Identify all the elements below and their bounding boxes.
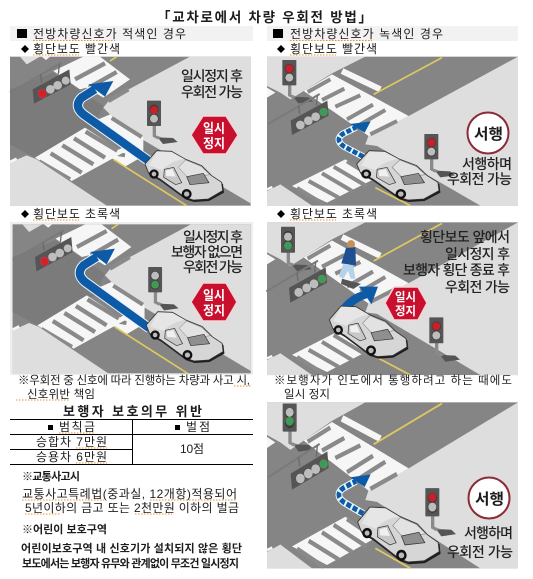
panel: red signal, green crosswalk (10, 222, 253, 375)
panel: green signal, red crosswalk (267, 57, 518, 206)
traffic accident note: 교통사고특례법(중과실, 12개항)적용되어 (22, 487, 237, 501)
penalty table (10, 419, 253, 465)
note: right (274, 373, 512, 401)
penalty table: 범칙금 (59, 420, 95, 434)
stop sign: 일시 (203, 121, 225, 136)
section header: green vehicle signal: 전방차량신호가 녹색인 경우 (290, 27, 443, 41)
caption: 우회전 가능 (447, 544, 513, 560)
caption: 일시정지 후 (181, 68, 243, 84)
section header: red vehicle signal (10, 26, 253, 41)
sub-heading: crosswalk red, left: 횡단보도 빨간색 (33, 42, 120, 56)
slow sign (468, 478, 510, 518)
child protection zone note (21, 523, 242, 570)
caption: 우회전 가능 (445, 279, 510, 295)
slow sign: 서행 (474, 126, 503, 143)
penalty table: 벌점 (186, 420, 210, 434)
note: left (16, 373, 252, 401)
sub-heading: crosswalk green, left: 횡단보도 초록색 (33, 207, 120, 221)
caption: 서행하며 (462, 156, 512, 172)
traffic accident note: ※교통사고시 (22, 470, 80, 483)
caption: 우회전 가능 (183, 259, 243, 275)
slow sign (468, 112, 508, 154)
caption: 우회전 가능 (447, 171, 512, 187)
note: right: 일시 정지 (284, 387, 330, 401)
sub-heading: crosswalk green, right: 횡단보도 초록색 (290, 207, 377, 221)
note: left: 신호위반 책임 (27, 387, 95, 401)
stop sign (191, 116, 238, 154)
stop sign (191, 283, 237, 321)
caption: 보행자 없으면 (171, 244, 243, 260)
sub-heading: crosswalk red, right: 횡단보도 빨간색 (290, 42, 377, 56)
section header: red vehicle signal: 전방차량신호가 적색인 경우 (33, 27, 186, 41)
caption: 보행자 횡단 종료 후 (403, 262, 510, 278)
panel: green signal, green crosswalk with pedestrian (266, 222, 518, 375)
penalty table: 승용차 6만원 (36, 450, 107, 464)
caption (171, 229, 243, 275)
child protection zone note: 보도에서는 보행자 유무와 관계없이 무조건 일시정지 (22, 556, 239, 570)
stop sign (385, 287, 427, 320)
pedestrian (339, 240, 361, 289)
caption (181, 68, 243, 100)
stop sign: 일시 (395, 290, 416, 304)
caption: 우회전 가능 (181, 84, 243, 100)
caption: 서행하며 (464, 525, 513, 541)
stop sign: 정지 (203, 303, 225, 318)
table heading: 보행자 보호의무 위반 (63, 404, 202, 419)
title: 「교차로에서 차량 우회전 방법」 (157, 10, 372, 25)
penalty table: 승합차 7만원 (36, 435, 107, 449)
caption: 일시정지 후 (445, 246, 510, 262)
penalty table: 10점 (180, 442, 204, 456)
stop sign: 일시 (203, 288, 225, 303)
caption: 일시정지 후 (183, 229, 243, 245)
caption (447, 525, 513, 560)
panel: green signal, green crosswalk, slow (267, 402, 518, 568)
caption: 횡단보도 앞에서 (420, 229, 510, 245)
stop sign: 정지 (395, 304, 416, 318)
traffic accident note: 5년이하의 금고 또는 2천만원 이하의 벌금 (25, 500, 239, 515)
caption (447, 156, 512, 187)
caption (403, 229, 510, 295)
section header: green vehicle signal (267, 26, 518, 41)
stop sign: 정지 (203, 136, 225, 151)
note: right: ※보행자가 인도에서 통행하려고 하는 때에도 (274, 373, 512, 387)
child protection zone note: ※어린이 보호구역 (22, 523, 107, 536)
traffic accident note (22, 470, 239, 515)
slow sign: 서행 (475, 491, 504, 508)
child protection zone note: 어린이보호구역 내 신호기가 설치되지 않은 횡단 (21, 541, 242, 555)
panel: red signal, red crosswalk (10, 57, 251, 206)
note: left: ※우회전 중 신호에 따라 진행하는 차량과 사고 시, (18, 373, 250, 387)
